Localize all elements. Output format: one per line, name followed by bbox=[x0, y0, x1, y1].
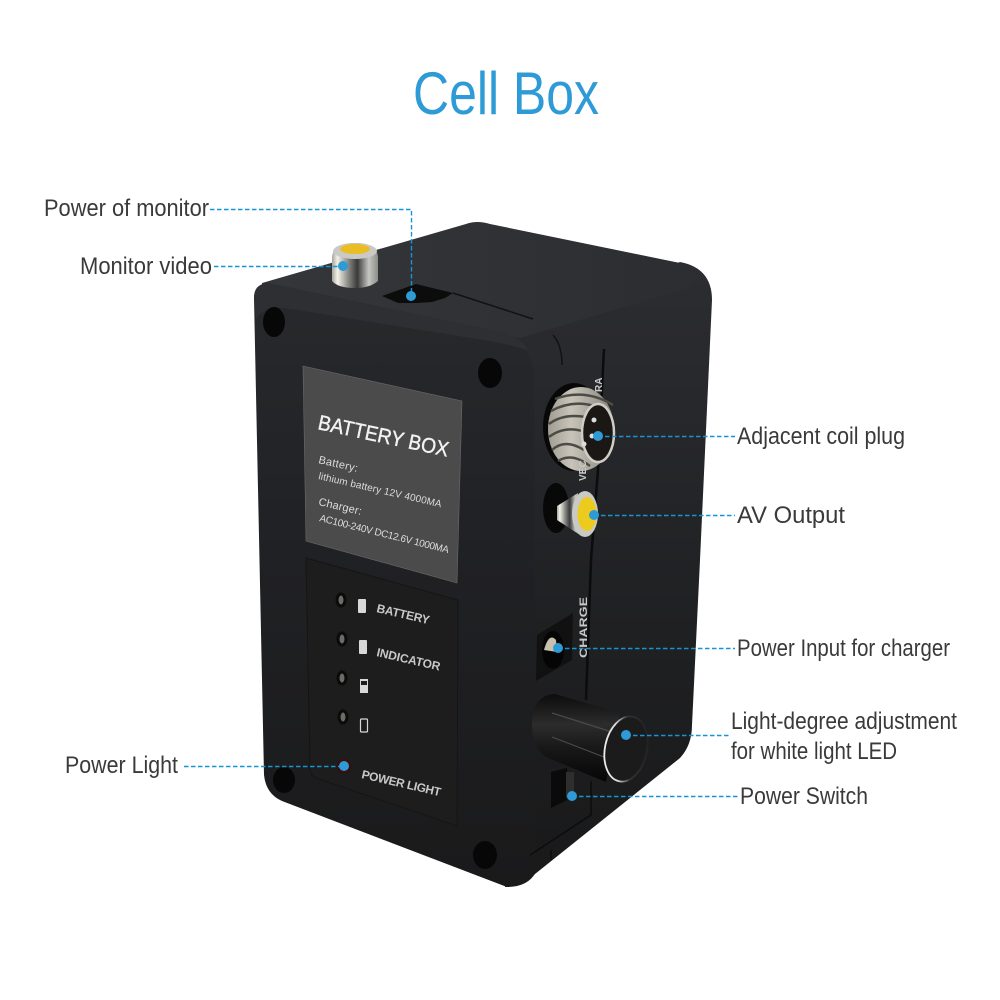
box side face bbox=[505, 262, 712, 887]
spec label bbox=[303, 366, 462, 583]
callout: monitor video: Monitor video bbox=[80, 253, 212, 280]
spec label: Battery: bbox=[317, 454, 359, 475]
indicator panel: BATTERY bbox=[375, 601, 431, 627]
spec label: BATTERY BOX bbox=[316, 411, 451, 462]
product photo: battery box: VEC bbox=[578, 460, 589, 481]
product photo: battery box bbox=[254, 222, 712, 887]
callout: adjacent coil plug: Adjacent coil plug bbox=[737, 423, 905, 450]
callout: adjacent coil plug bbox=[593, 423, 905, 450]
charge socket bbox=[536, 613, 573, 681]
LEDs bbox=[337, 594, 347, 723]
screw holes bbox=[263, 307, 502, 869]
aviation connector bbox=[543, 383, 614, 471]
callout: power input for charger bbox=[553, 635, 950, 662]
callout: light-degree adjustment: Light-degree adjustment bbox=[731, 708, 957, 735]
indicator panel: INDICATOR bbox=[375, 645, 442, 674]
callout: power of monitor bbox=[44, 195, 416, 301]
callout: power switch bbox=[567, 783, 868, 810]
spec label: lithium battery 12V 4000MA bbox=[317, 471, 443, 510]
box front face bbox=[254, 283, 536, 887]
title: Cell Box bbox=[413, 60, 599, 127]
callout: power of monitor: Power of monitor bbox=[44, 195, 209, 222]
callout: monitor video bbox=[80, 253, 348, 280]
seam lines bbox=[453, 293, 562, 365]
callout: AV output bbox=[589, 502, 845, 529]
top rim of front face bbox=[254, 283, 528, 350]
callout: power switch: Power Switch bbox=[740, 783, 868, 810]
dimmer knob bbox=[532, 694, 653, 786]
spec label: Charger: bbox=[317, 496, 363, 518]
battery level icons bbox=[358, 599, 368, 732]
product photo: battery box: CHARGE bbox=[578, 597, 590, 658]
callout: power light bbox=[65, 752, 349, 779]
callout: power input for charger: Power Input for charger bbox=[737, 635, 950, 662]
callout: light-degree adjustment: for white light LED bbox=[731, 738, 897, 765]
indicator panel: POWER LIGHT bbox=[360, 767, 443, 799]
side text: RA bbox=[594, 378, 605, 392]
callout: power light: Power Light bbox=[65, 752, 178, 779]
spec label: AC100-240V DC12.6V 1000MA bbox=[318, 513, 450, 556]
indicator panel bbox=[306, 558, 458, 826]
callout: AV output: AV Output bbox=[737, 502, 845, 529]
box top face bbox=[262, 222, 708, 338]
callout: light-degree adjustment bbox=[621, 708, 957, 765]
power socket on top bbox=[382, 284, 453, 303]
RCA output bbox=[543, 483, 598, 537]
power switch bbox=[551, 768, 574, 808]
RCA top jack bbox=[332, 243, 378, 288]
